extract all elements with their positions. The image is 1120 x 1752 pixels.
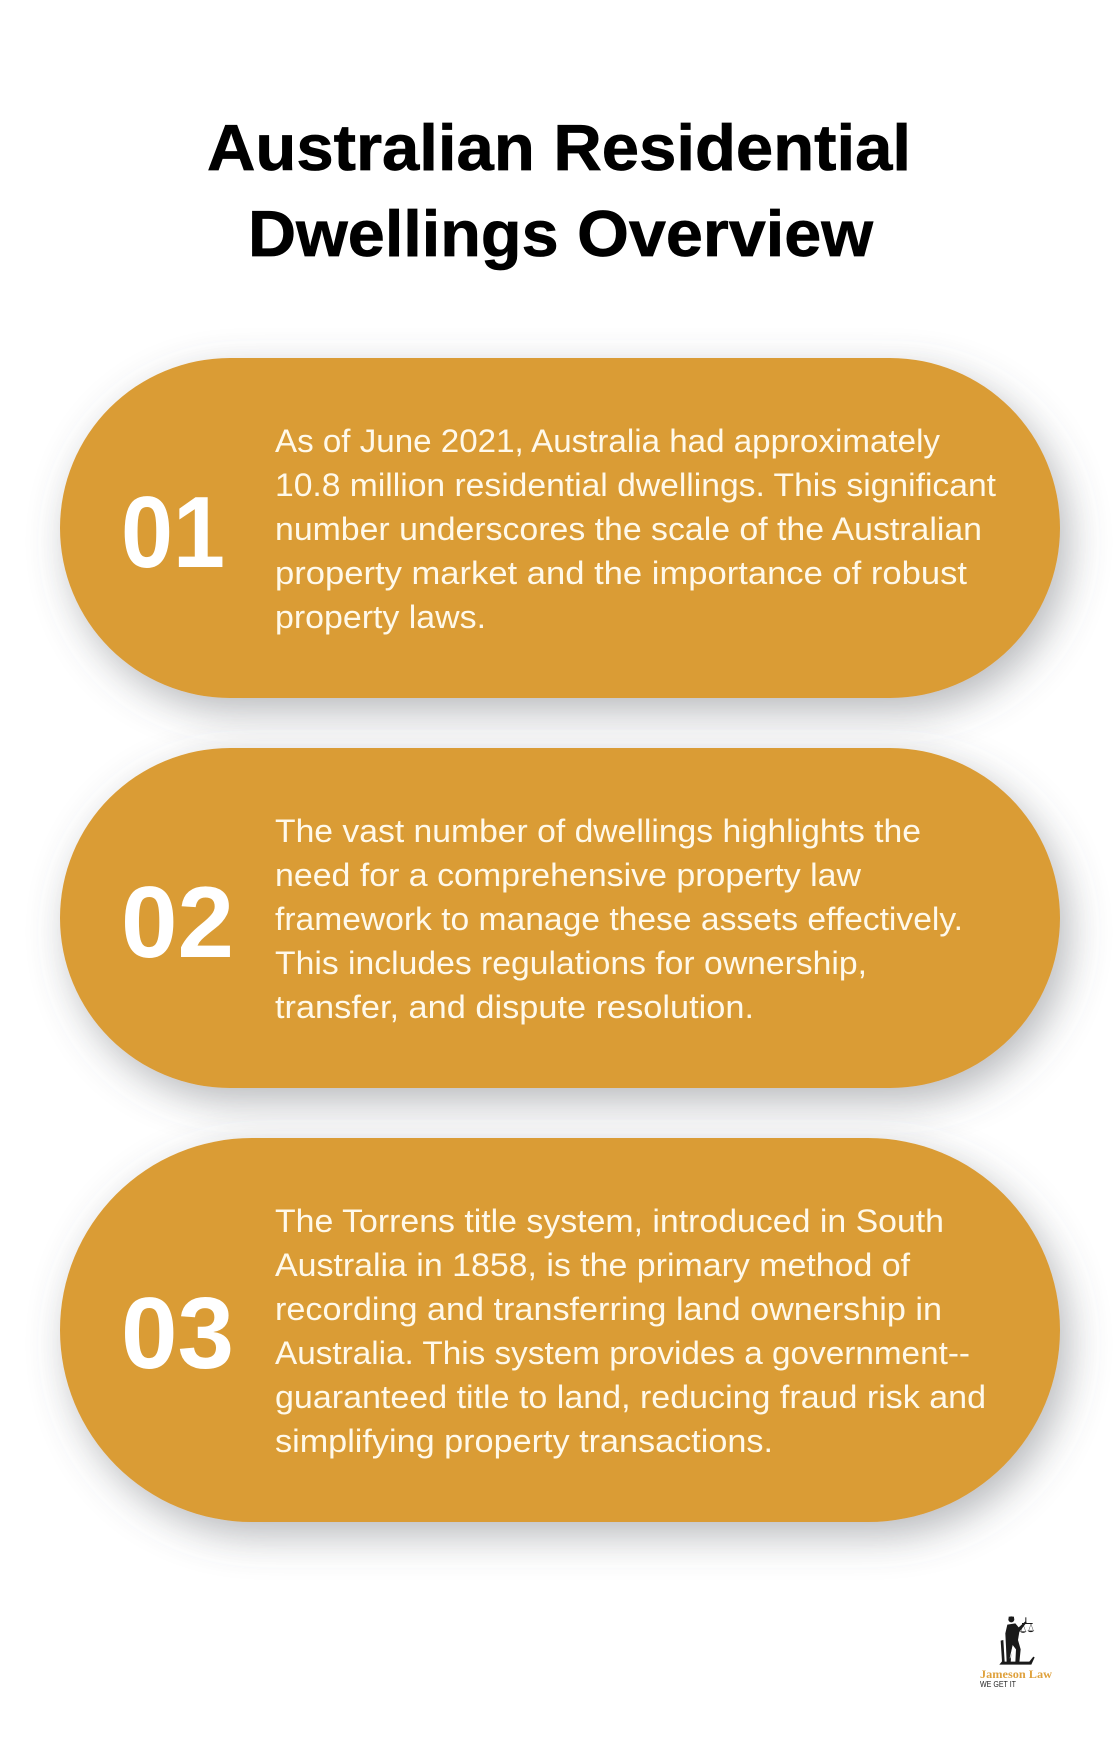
panel: 03 Torrens title system [60, 1138, 1060, 1522]
text block 03: guaranteed title to land, reducing fraud risk and [275, 1379, 986, 1415]
text block 03: simplifying property transactions. [275, 1423, 773, 1459]
panel: 02 property law framework [60, 748, 1060, 1088]
text block 03: Australia. This system provides a government-- [275, 1335, 970, 1371]
panel: 01 residential dwellings [60, 358, 1060, 698]
logo tagline: WE GET IT [980, 1680, 1016, 1689]
title: Dwellings Overview [248, 197, 873, 270]
title [207, 111, 911, 270]
text block 01: property market and the importance of robust [275, 555, 967, 591]
text block 02: transfer, and dispute resolution. [275, 989, 754, 1025]
text block 03: Australia in 1858, is the primary method of [275, 1247, 910, 1283]
text block 02: The vast number of dwellings highlights the [275, 813, 921, 849]
number 01: 01 [121, 477, 225, 589]
pill background 01 [60, 358, 1060, 698]
pill background 02 [60, 748, 1060, 1088]
logo name: Jameson Law [980, 1667, 1052, 1681]
pill background 03 [60, 1138, 1060, 1522]
text block 02: This includes regulations for ownership, [275, 945, 867, 981]
text block 02: need for a comprehensive property law [275, 857, 862, 893]
text block 03 [275, 1203, 986, 1459]
text block 03: The Torrens title system, introduced in South [275, 1203, 944, 1239]
text block 03: recording and transferring land ownership in [275, 1291, 942, 1327]
number 03: 03 [121, 1278, 234, 1390]
text block 01: property laws. [275, 599, 486, 635]
text block 01: 10.8 million residential dwellings. This significant [275, 467, 996, 503]
text block 01: As of June 2021, Australia had approximately [275, 423, 940, 459]
number 02: 02 [121, 867, 234, 979]
text block 02 [275, 813, 963, 1025]
icon: lady justice with scales [999, 1616, 1035, 1665]
title: Australian Residential [207, 111, 911, 184]
text block 02: framework to manage these assets effectively. [275, 901, 963, 937]
text block 01: number underscores the scale of the Australian [275, 511, 982, 547]
text block 01 [275, 423, 996, 635]
logo: Jameson Law [980, 1616, 1052, 1689]
